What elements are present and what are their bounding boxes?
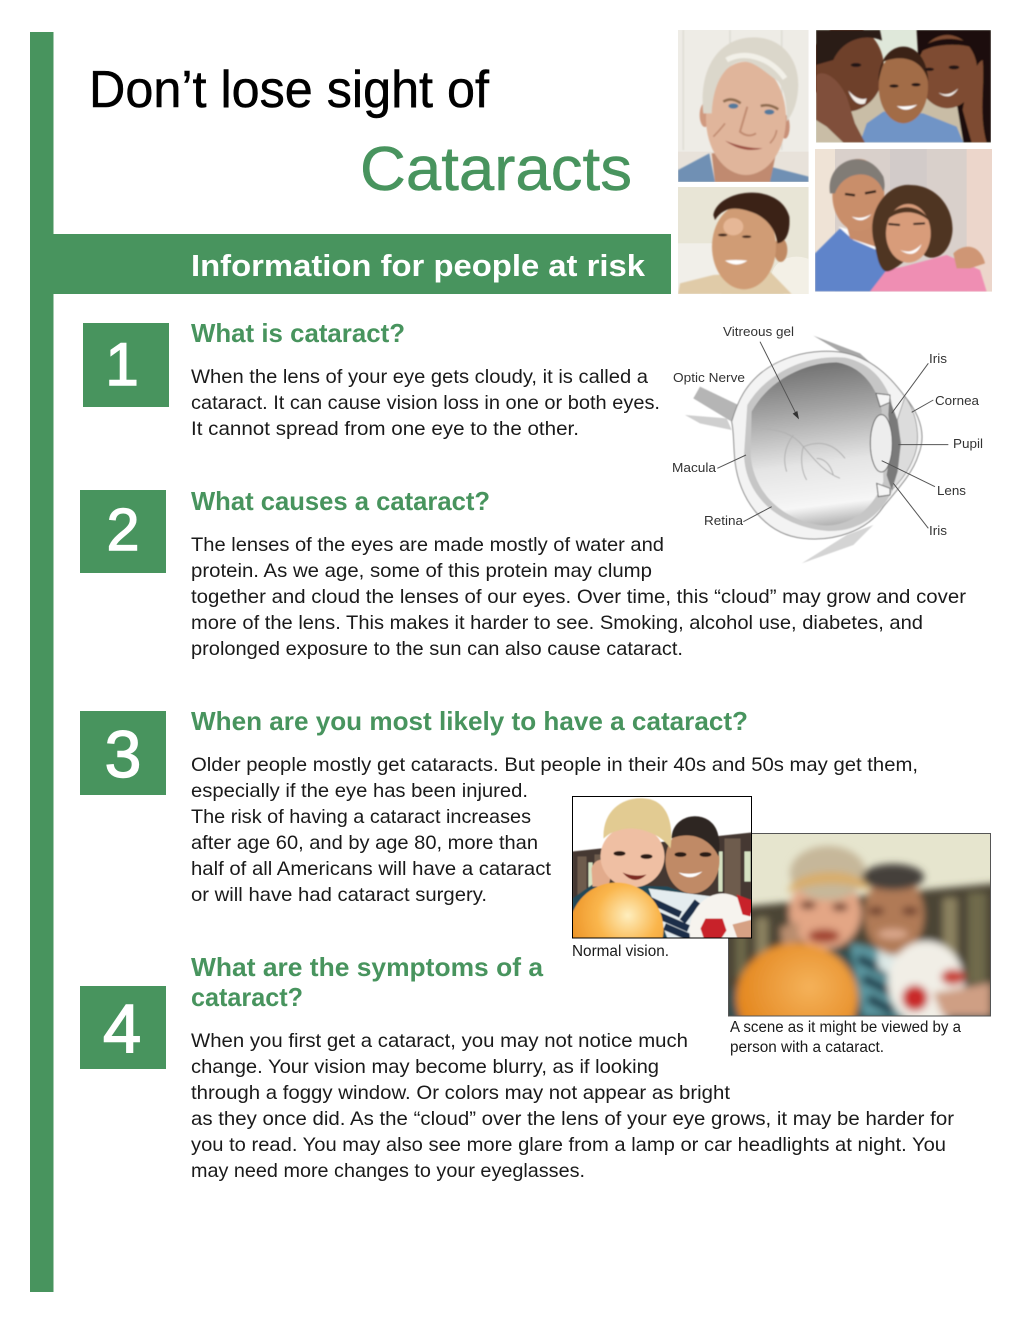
title: Cataracts	[360, 135, 632, 204]
section 3 text: Older people mostly get cataracts. But people in their 40s and 50s may get them,	[191, 754, 918, 776]
eye labels: Macula	[672, 460, 717, 475]
eye labels: Vitreous gel	[723, 324, 794, 339]
photo: family of three	[809, 25, 991, 143]
subtitle banner	[53, 234, 671, 294]
section 2 text: prolonged exposure to the sun can also cause cataract.	[191, 638, 683, 660]
section 1 text: What is cataract?	[191, 318, 405, 348]
section 1 text: When the lens of your eye gets cloudy, it is called a	[191, 366, 648, 388]
section 1 text: It cannot spread from one eye to the other.	[191, 418, 579, 440]
eye labels	[672, 324, 983, 538]
section 2 text	[191, 486, 967, 660]
caption: cataract vision: person with a cataract.	[730, 1039, 884, 1056]
photo: scene with cataract vision	[718, 833, 1000, 1053]
section 4 text	[191, 952, 955, 1182]
section 4 text: as they once did. As the “cloud” over the lens of your eye grows, it may be harder for	[191, 1108, 955, 1130]
eye labels: Pupil	[953, 436, 983, 451]
photo: couple	[815, 149, 992, 292]
photo: older man	[678, 30, 809, 182]
section 2 text: together and cloud the lenses of our eyes. Over time, this “cloud” may grow and cover	[191, 586, 967, 608]
caption: cataract vision	[730, 1019, 961, 1056]
section 3 number box	[80, 711, 166, 795]
section 4 text: you to read. You may also see more glare from a lamp or car headlights at night. You	[191, 1134, 946, 1156]
section 1 number box	[83, 323, 169, 407]
section 3 text	[191, 706, 918, 906]
eye labels: Iris	[929, 351, 947, 366]
section 3 text: When are you most likely to have a cataract?	[191, 706, 748, 736]
section 3 text: The risk of having a cataract increases	[191, 806, 531, 828]
photo collage of people	[678, 25, 992, 297]
section 4 number box	[80, 986, 166, 1069]
section 1 text: cataract. It can cause vision loss in one or both eyes.	[191, 392, 660, 414]
section 4 text: What are the symptoms of a	[191, 952, 544, 982]
section 3 text: especially if the eye has been injured.	[191, 780, 528, 802]
section 2 number box	[80, 490, 166, 573]
section 1 text	[191, 318, 660, 440]
caption: cataract vision: A scene as it might be viewed by a	[730, 1019, 961, 1036]
section 3 text: or will have had cataract surgery.	[191, 884, 487, 906]
section 3 number box: 3	[105, 717, 141, 791]
photo: normal vision	[570, 796, 756, 976]
section 4 text: cataract?	[191, 982, 303, 1012]
eye labels: Lens	[937, 483, 966, 498]
section 4 number box: 4	[103, 990, 141, 1067]
section 4 text: through a foggy window. Or colors may not appear as bright	[191, 1082, 731, 1104]
eye illustration	[685, 336, 948, 563]
section 3 text: half of all Americans will have a cataract	[191, 858, 552, 880]
section 2 text: more of the lens. This makes it harder to see. Smoking, alcohol use, diabetes, and	[191, 612, 923, 634]
eye labels: Optic Nerve	[673, 370, 745, 385]
section 2 number box: 2	[107, 497, 139, 563]
eye labels: Cornea	[935, 393, 980, 408]
eye labels: Iris	[929, 523, 947, 538]
subtitle banner: Information for people at risk	[191, 248, 646, 283]
photo: older woman	[678, 187, 809, 294]
eye labels: Retina	[704, 513, 744, 528]
title: Don’t lose sight of	[89, 61, 490, 119]
section 4 text: may need more changes to your eyeglasses.	[191, 1160, 585, 1182]
section 2 text: protein. As we age, some of this protein may clump	[191, 560, 652, 582]
section 2 text: What causes a cataract?	[191, 486, 490, 516]
section 3 text: after age 60, and by age 80, more than	[191, 832, 538, 854]
section 1 number box: 1	[105, 331, 139, 398]
section 4 text: change. Your vision may become blurry, as if looking	[191, 1056, 659, 1078]
section 4 text: When you first get a cataract, you may not notice much	[191, 1030, 688, 1052]
eye anatomy diagram	[672, 324, 983, 563]
title	[89, 61, 632, 204]
green sidebar	[30, 32, 54, 1292]
section 2 text: The lenses of the eyes are made mostly of water and	[191, 534, 664, 556]
caption: normal vision: Normal vision.	[572, 943, 669, 960]
